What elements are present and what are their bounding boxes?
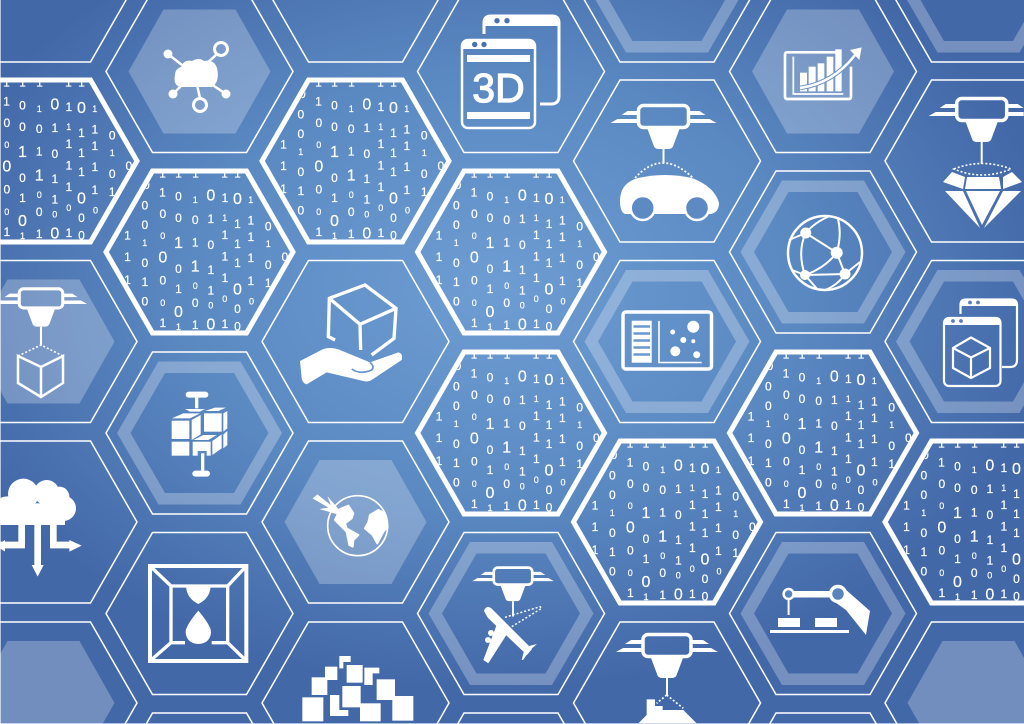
panel: binary data hexagon 5: 111101000001 — [454, 376, 582, 513]
icon: printer head — [616, 634, 718, 695]
icon: printer head — [472, 568, 554, 617]
panel: binary data hexagon 4: 101000011100101111100111100110111110001110011111 — [436, 166, 600, 334]
icon: printer head — [929, 98, 1024, 164]
icon: car — [620, 163, 719, 220]
panel: hand holding cube — [262, 260, 449, 422]
panel: ring hexagon top right — [885, 0, 1024, 62]
panel: binary data hexagon 5: 101000011100101111100111100110111110001110011111 — [436, 348, 600, 515]
panel: binary data hexagon 4: 111101000001 — [454, 195, 582, 332]
panel: bottom edge hexagon right — [770, 713, 876, 724]
icon: printed ship — [638, 695, 697, 723]
panel: bottom edge hexagon left — [146, 713, 253, 724]
panel: binary data hexagon 6: 00101000 — [626, 457, 710, 603]
icon: network globe — [788, 216, 862, 290]
panel: ship printing — [574, 622, 760, 724]
panel: binary data hexagon 6: 111101000001 — [610, 465, 738, 602]
panel: binary data hexagon 2: 111101000001 — [142, 195, 271, 332]
icon: printer head — [0, 289, 87, 346]
panel: drop printer — [106, 532, 293, 694]
panel: printed diamond — [885, 80, 1024, 242]
panel: binary data hexagon 3: 101000011100101111100111100110111110001110011111 — [280, 76, 444, 243]
panel: bottom edge hexagon centre — [458, 713, 564, 724]
icon: printer head — [610, 106, 716, 163]
icon: diamond — [943, 164, 1022, 228]
icon: cloud network — [164, 42, 230, 112]
panel: growth chart — [730, 0, 916, 152]
panel: modular cubes — [106, 352, 293, 514]
icon: scattered blocks — [302, 656, 413, 721]
panel: empty hexagon top centre — [262, 0, 449, 62]
panel: binary data hexagon 8: 00101000 — [937, 457, 1021, 603]
panel: bottom left tinted hexagon — [0, 622, 137, 724]
panel: globe network — [730, 171, 916, 333]
panel: airplane printing — [418, 532, 604, 694]
panel: 3D window — [418, 0, 604, 152]
panel: binary data hexagon 2: 00101000 — [158, 187, 242, 333]
icon: printer frame with drop — [150, 566, 246, 661]
panel: paper blocks — [262, 622, 449, 724]
panel: binary data hexagon 7: 111101000001 — [766, 376, 894, 513]
panel: binary data hexagon 3: 111101000001 — [298, 104, 427, 241]
panel: binary data hexagon 7: 00101000 — [782, 368, 866, 514]
panel: world globe with pointer — [262, 441, 449, 603]
icon: cloud download — [0, 479, 82, 577]
panel: binary data hexagon 4: 00101000 — [470, 187, 554, 333]
icon: globe with arrow — [313, 494, 388, 556]
icon: tablet — [623, 312, 712, 369]
panel: 3D model window — [885, 260, 1024, 422]
panel: robot arm — [730, 532, 916, 694]
panel: binary data hexagon 2: 101000011100101111100111100110111110001110011111 — [124, 166, 288, 334]
panel: cloud network — [106, 0, 293, 152]
icon: cube assembly — [172, 392, 227, 477]
panel: binary data hexagon 6: 101000011100101111100111100110111110001110011111 — [592, 436, 756, 604]
icon: 3D windows — [462, 16, 559, 128]
panel: printed cube — [0, 260, 137, 422]
panel: cloud with arrows — [0, 441, 137, 603]
panel: printed car — [574, 80, 760, 242]
panel: control tablet — [574, 260, 760, 422]
icon: hand holding cube — [300, 285, 402, 384]
panel: empty hexagon top left — [0, 0, 137, 62]
panel: bottom right tinted hexagon — [885, 622, 1024, 724]
icon: 3D windows: 3D — [472, 65, 525, 111]
panel: binary data hexagon 1: 00101000 — [2, 96, 86, 242]
panel: binary data hexagon 7: 101000011100101111100111100110111110001110011111 — [748, 348, 912, 515]
panel: ring hexagon top — [574, 0, 760, 62]
panel: binary data hexagon 5: 00101000 — [470, 368, 554, 514]
icon: airplane — [483, 607, 542, 663]
icon: window with cube — [944, 299, 1017, 386]
icon: cube — [18, 345, 63, 397]
icon: growth chart — [785, 47, 862, 99]
panel: binary data hexagon 3: 00101000 — [314, 96, 398, 242]
icon: robot arm — [770, 586, 870, 635]
